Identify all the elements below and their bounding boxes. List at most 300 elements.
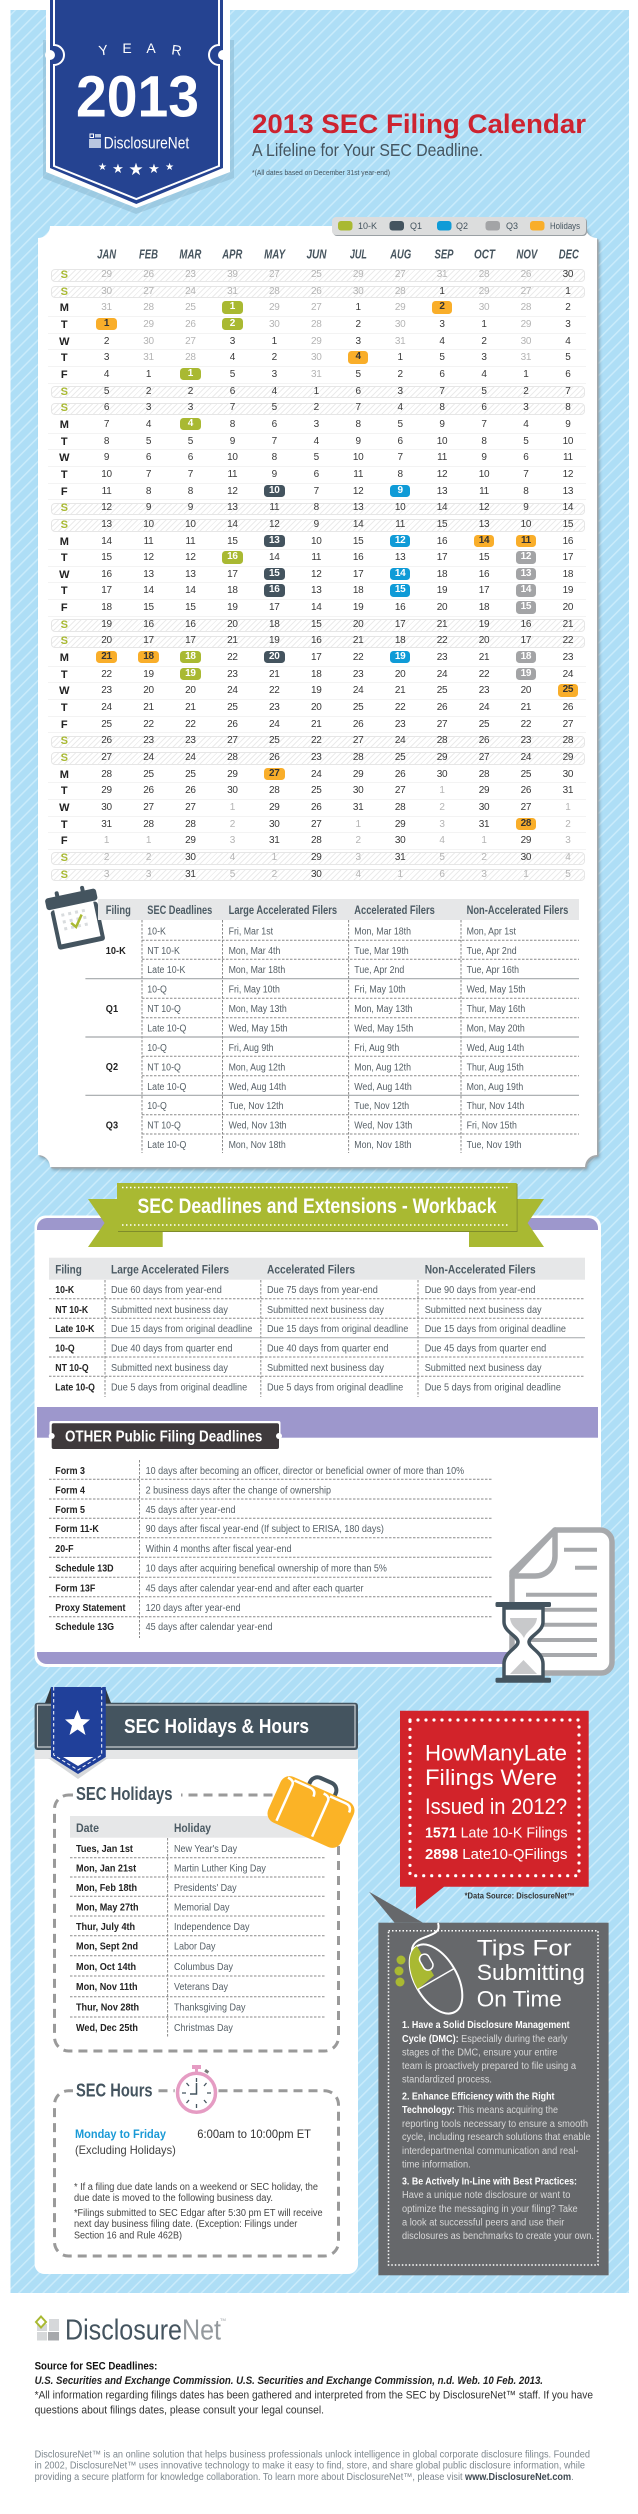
calendar grid: 2	[104, 852, 109, 863]
calendar grid: 28	[479, 269, 489, 280]
calendar grid: 17	[479, 585, 489, 596]
table column: accelerated filers: Mon, May 13th	[354, 1003, 412, 1014]
calendar grid: 26	[395, 769, 405, 780]
calendar grid: 4	[188, 418, 193, 429]
calendar grid: 28	[185, 352, 196, 363]
calendar grid: 29	[395, 302, 405, 313]
calendar grid: 14	[437, 502, 447, 513]
calendar grid: 7	[104, 419, 109, 430]
calendar grid: 25	[311, 269, 322, 280]
calendar grid: 11	[353, 469, 363, 480]
table column: SEC deadlines: Late 10-K	[147, 964, 186, 975]
calendar grid: 10	[437, 436, 447, 447]
panel: calendar card	[38, 226, 600, 1170]
table column: large accelerated filers: Mon, Nov 18th	[229, 1139, 286, 1150]
calendar grid: 30	[521, 336, 531, 347]
calendar grid: 11	[563, 452, 573, 463]
calendar grid: 16	[395, 602, 405, 613]
calendar grid: 1	[272, 336, 277, 347]
calendar grid: W	[59, 569, 69, 581]
legend: Q3	[506, 221, 518, 231]
calendar grid: 8	[481, 436, 487, 447]
calendar grid: 27	[227, 735, 238, 746]
calendar grid: 13	[479, 519, 489, 530]
calendar grid: 19	[185, 668, 196, 679]
calendar grid: 3	[439, 819, 445, 830]
calendar grid: 30	[479, 802, 489, 813]
table column: accelerated filers: Wed, Aug 14th	[354, 1080, 412, 1092]
calendar grid: 27	[269, 269, 280, 280]
calendar grid: 4	[439, 835, 445, 846]
table column: accelerated filers: Mon, Nov 18th	[354, 1139, 411, 1150]
calendar grid: 18	[101, 602, 112, 613]
workback column: large accelerated: Submitted next business day	[111, 1362, 228, 1374]
calendar grid: 29	[479, 286, 489, 297]
calendar grid: 29	[395, 819, 405, 830]
table column: large accelerated filers: Fri, Mar 1st	[229, 925, 273, 937]
calendar grid: 11	[521, 534, 531, 546]
calendar grid: 7	[523, 469, 529, 480]
calendar grid: 3	[272, 369, 277, 380]
calendar grid: 18	[227, 585, 238, 596]
calendar grid: 25	[227, 702, 238, 713]
calendar grid: 3	[146, 869, 151, 880]
calendar grid: 1	[188, 368, 193, 379]
calendar grid: 31	[101, 819, 112, 830]
calendar grid: 26	[521, 269, 531, 280]
banner label: YEAR: Y	[98, 41, 110, 59]
calendar grid: 14	[353, 519, 363, 530]
calendar grid: 10	[479, 469, 489, 480]
calendar grid: 25	[185, 302, 196, 313]
calendar grid: 18	[185, 651, 196, 662]
tip 1: standardized process.	[402, 2074, 492, 2086]
table column: large accelerated filers: Mon, Mar 4th	[229, 944, 280, 956]
tip 1: stages of the DMC, ensure your entire	[402, 2048, 558, 2058]
calendar grid: 26	[311, 286, 322, 297]
calendar grid: M	[60, 302, 69, 314]
calendar grid: 14	[143, 585, 154, 596]
calendar grid: 14	[395, 568, 405, 579]
calendar grid: 16	[185, 619, 196, 630]
calendar grid: 9	[188, 502, 193, 513]
table column: large accelerated filers: Mon, May 13th	[229, 1003, 287, 1014]
calendar grid: 13	[563, 486, 573, 497]
calendar grid: 27	[269, 768, 280, 779]
other column: form: 20-F	[55, 1543, 74, 1555]
calendar grid: 4	[397, 402, 403, 413]
calendar grid: 6	[481, 402, 487, 413]
source text: Source for SEC Deadlines:	[35, 2360, 157, 2372]
calendar grid: 28	[521, 818, 531, 829]
calendar grid: 9	[104, 452, 109, 463]
calendar grid: 15	[269, 568, 280, 579]
calendar grid: 24	[563, 669, 573, 680]
calendar grid: 9	[523, 502, 529, 513]
tip 3	[402, 2176, 594, 2242]
workback column: large accelerated: Due 40 days from quarter end	[111, 1343, 232, 1355]
calendar grid: 20	[353, 619, 363, 630]
banner: year 2013	[43, 0, 234, 214]
calendar grid: 2	[356, 319, 361, 330]
calendar grid: 28	[311, 835, 322, 846]
calendar grid: M	[60, 419, 69, 431]
calendar grid: 21	[563, 619, 573, 630]
workback column: accelerated: Due 15 days from original deadline	[267, 1324, 408, 1335]
calendar grid: 1	[272, 852, 277, 863]
calendar grid: 18	[269, 619, 280, 630]
calendar grid: 25	[353, 702, 363, 713]
table column: filing: Q3	[106, 1120, 118, 1132]
calendar grid: 5	[188, 436, 193, 447]
calendar month headers: FEB	[139, 248, 158, 262]
table header band	[98, 899, 579, 920]
calendar grid: 12	[521, 551, 531, 562]
calendar grid: 30	[521, 852, 531, 863]
calendar month headers: APR	[222, 248, 242, 262]
workback column: filing: Late 10-K	[55, 1324, 95, 1334]
table column: SEC deadlines: Late 10-Q	[147, 1139, 186, 1150]
other column: deadline: 45 days after year-end	[146, 1504, 236, 1516]
calendar grid: 2	[104, 336, 109, 347]
table header band: Non-Accelerated Filers	[467, 903, 569, 917]
calendar grid: 23	[143, 735, 154, 746]
calendar grid: 18	[437, 569, 447, 580]
other column: form: Schedule 13G	[55, 1622, 114, 1633]
workback column: accelerated: Submitted next business day	[267, 1304, 384, 1316]
calendar grid: S	[61, 635, 68, 647]
table column: SEC deadlines: 10-Q	[147, 1041, 167, 1053]
calendar grid: 22	[437, 635, 447, 646]
calendar grid: S	[61, 619, 68, 631]
workback column: accelerated: Due 40 days from quarter end	[267, 1343, 388, 1355]
calendar grid: 24	[185, 286, 196, 297]
calendar grid: 1	[230, 802, 235, 813]
calendar grid: 10	[185, 519, 196, 530]
calendar grid: 9	[314, 519, 319, 530]
calendar grid: 13	[395, 552, 405, 563]
calendar grid: 13	[101, 519, 112, 530]
workback column: filing	[55, 1285, 95, 1393]
heading tag: other public filing deadlines	[49, 1421, 282, 1451]
holiday column: date: Mon, May 27th	[76, 1902, 139, 1914]
calendar grid: 15	[143, 602, 154, 613]
calendar grid: 25	[563, 684, 573, 695]
calendar grid: 3	[481, 352, 487, 363]
holiday column: date: Thur, Nov 28th	[76, 2002, 139, 2014]
table column: non-accelerated filers: Mon, Apr 1st	[467, 925, 516, 937]
calendar grid: 1	[104, 318, 109, 329]
calendar grid: 30	[143, 336, 154, 347]
calendar grid: 30	[101, 286, 112, 297]
calendar grid: 3	[230, 835, 235, 846]
workback header band	[49, 1258, 585, 1280]
workback column: non-accelerated: Due 90 days from year-end	[425, 1285, 536, 1296]
calendar grid: 4	[230, 852, 235, 863]
holiday column: name: Columbus Day	[174, 1961, 233, 1973]
calendar month headers: OCT	[474, 248, 496, 262]
calendar grid: 15	[437, 519, 447, 530]
banner label: YEAR	[98, 40, 183, 59]
calendar grid: 15	[227, 536, 238, 546]
workback column: filing: NT 10-K	[55, 1304, 88, 1315]
table column: accelerated filers: Fri, May 10th	[354, 983, 406, 995]
holiday column: name: New Year's Day	[174, 1844, 237, 1855]
calendar grid: 21	[353, 635, 363, 646]
calendar grid: 17	[521, 635, 531, 646]
calendar grid: 2	[356, 835, 361, 846]
calendar grid: 26	[563, 702, 573, 713]
calendar grid: 6	[565, 369, 570, 380]
holiday column: date: Mon, Feb 18th	[76, 1882, 137, 1894]
calendar grid: 18	[143, 651, 154, 662]
calendar grid: 23	[521, 735, 531, 746]
workback column: non-accelerated: Due 45 days from quarter end	[425, 1343, 546, 1355]
calendar grid: 26	[227, 719, 238, 730]
calendar grid: T	[61, 702, 68, 714]
calendar grid: 2	[565, 819, 570, 830]
tips heading	[477, 1936, 585, 2012]
table column: filing: Q2	[106, 1062, 118, 1073]
calendar grid: 1	[314, 386, 319, 397]
calendar grid: 29	[563, 752, 573, 763]
calendar grid: 12	[437, 469, 447, 480]
calendar grid: 22	[311, 735, 322, 746]
holiday column: date: Wed, Dec 25th	[76, 2022, 138, 2034]
calendar grid: 16	[227, 551, 238, 562]
calendar grid: S	[61, 402, 68, 414]
calendar grid: 1	[565, 802, 570, 813]
calendar grid: T	[61, 785, 68, 797]
banner stars: ★	[112, 161, 124, 176]
calendar grid: 15	[563, 519, 573, 530]
calendar grid: 13	[143, 569, 154, 580]
heading: SEC holidays and hours: SEC Holidays & Hours	[124, 1716, 309, 1738]
calendar grid: S	[61, 735, 68, 747]
calendar grid: M	[60, 536, 69, 548]
calendar grid: 2	[230, 819, 235, 830]
calendar grid: 28	[395, 802, 405, 813]
calendar grid: 30	[563, 269, 573, 280]
heading: SEC hours: SEC Hours	[76, 2081, 153, 2101]
other column: form	[55, 1465, 126, 1633]
calendar grid: 1	[481, 319, 487, 330]
table column: large accelerated filers: Fri, May 10th	[229, 983, 280, 995]
tip 3: 3. Be Actively In-Line with Best Practices:	[402, 2176, 577, 2188]
calendar grid: 13	[311, 585, 322, 596]
calendar grid: 16	[437, 536, 447, 546]
table column: non-accelerated filers: Wed, May 15th	[467, 983, 526, 995]
workback header band: Large Accelerated Filers	[111, 1262, 229, 1276]
calendar grid: 1	[356, 302, 361, 313]
calendar grid: 18	[353, 585, 363, 596]
table column: large accelerated filers: Fri, Aug 9th	[229, 1041, 274, 1053]
calendar grid: 3	[397, 386, 403, 397]
calendar grid: 22	[185, 719, 196, 730]
tip 3: optimize the messaging in your filing? Take	[402, 2204, 578, 2215]
table column: large accelerated filers: Wed, Nov 13th	[229, 1119, 287, 1131]
calendar grid: 31	[395, 336, 405, 347]
calendar grid: 9	[230, 436, 235, 447]
table: workback	[49, 1258, 585, 1397]
calendar grid: 23	[395, 719, 405, 730]
calendar grid: 20	[143, 685, 154, 696]
holiday column: date: Mon, Oct 14th	[76, 1961, 136, 1973]
workback column: large accelerated	[111, 1285, 252, 1394]
holiday table header	[70, 1816, 326, 1838]
calendar grid: 2	[481, 336, 487, 347]
calendar grid: 3	[188, 402, 193, 413]
calendar grid: 24	[521, 752, 531, 763]
calendar grid: 3	[356, 852, 361, 863]
calendar grid: 4	[230, 352, 235, 363]
calendar grid: 14	[479, 534, 489, 546]
calendar grid: 1	[523, 869, 529, 880]
calendar grid: 20	[479, 635, 489, 646]
calendar grid: 8	[314, 502, 319, 513]
calendar grid: 22	[101, 669, 112, 680]
calendar grid: 26	[185, 319, 196, 330]
calendar grid: 30	[227, 785, 238, 796]
calendar grid: 21	[227, 635, 238, 646]
calendar grid: 6	[523, 452, 529, 463]
calendar grid: 27	[395, 785, 405, 796]
calendar grid: 31	[311, 369, 322, 380]
other column: deadline: 120 days after year-end	[146, 1602, 241, 1614]
calendar grid: 10	[353, 452, 363, 463]
holiday column: name: Labor Day	[174, 1941, 216, 1953]
calendar grid: 26	[185, 785, 196, 796]
workback column: accelerated	[267, 1285, 408, 1394]
table column: accelerated filers: Tue, Nov 12th	[354, 1100, 409, 1111]
holiday column: date: Mon, Nov 11th	[76, 1982, 138, 1993]
banner number: 2013: 2013	[76, 65, 199, 130]
holiday column: name: Martin Luther King Day	[174, 1863, 266, 1875]
calendar grid: 26	[521, 785, 531, 796]
calendar grid: T	[61, 552, 68, 564]
calendar grid: 19	[353, 602, 363, 613]
other column: deadline: 45 days after calendar year-end	[146, 1622, 273, 1633]
calendar grid: 12	[143, 552, 154, 563]
calendar grid: 12	[479, 502, 489, 513]
calendar grid: 25	[101, 719, 112, 730]
calendar grid: 13	[437, 486, 447, 497]
calendar grid: 17	[269, 602, 280, 613]
other column: form: Form 4	[55, 1485, 86, 1497]
calendar grid: 6	[104, 402, 109, 413]
calendar grid: S	[61, 502, 68, 514]
table column: accelerated filers: Tue, Mar 19th	[354, 944, 409, 956]
table column: non-accelerated filers: Thur, Aug 15th	[467, 1061, 524, 1073]
calendar grid: 11	[269, 502, 279, 513]
hours: footnotes	[74, 2182, 323, 2242]
calendar grid: 3	[356, 336, 361, 347]
calendar grid: 16	[269, 584, 280, 595]
calendar grid: 13	[185, 569, 196, 580]
legend: Holidays	[550, 221, 580, 231]
note: year-end basis: *(All dates based on December 31st year-end)	[252, 168, 390, 177]
calendar grid: 27	[563, 719, 573, 730]
table column: SEC deadlines: 10-Q	[147, 983, 167, 995]
calendar grid: 26	[437, 702, 447, 713]
calendar grid: 30	[311, 869, 322, 880]
calendar grid: 15	[311, 619, 322, 630]
calendar grid: 3	[230, 336, 235, 347]
calendar grid: 29	[311, 852, 322, 863]
calendar grid: 29	[227, 769, 238, 780]
calendar grid: 22	[479, 669, 489, 680]
calendar grid: 28	[311, 319, 322, 330]
calendar grid: 16	[521, 619, 531, 630]
calendar grid: 23	[437, 652, 447, 663]
calendar grid: 4	[439, 336, 445, 347]
hours: footnotes: Section 16 and Rule 462B)	[74, 2231, 182, 2242]
calendar grid: F	[61, 369, 68, 381]
tip 2: Technology: This means acquiring the	[402, 2105, 558, 2116]
calendar grid: 23	[479, 685, 489, 696]
workback column: non-accelerated: Due 15 days from original deadline	[425, 1324, 566, 1335]
table header band: Accelerated Filers	[354, 903, 435, 917]
calendar grid: 6	[397, 436, 403, 447]
calendar grid: 30	[353, 286, 363, 297]
workback column: accelerated: Due 75 days from year-end	[267, 1285, 378, 1296]
calendar grid: 26	[269, 752, 280, 763]
calendar grid: 24	[185, 752, 196, 763]
table column: SEC deadlines: 10-K	[147, 925, 167, 937]
other column: deadline: 45 days after calendar year-end and after each quarter	[146, 1583, 363, 1595]
calendar grid: 27	[353, 735, 363, 746]
calendar grid: 22	[395, 702, 405, 713]
tip 3: a look at successful peers and use their	[402, 2218, 565, 2228]
calendar grid: 4	[356, 351, 361, 362]
calendar grid: 15	[353, 536, 363, 546]
calendar grid: 16	[353, 552, 363, 563]
calendar grid: 30	[269, 819, 280, 830]
calendar grid: 31	[185, 869, 196, 880]
table column: SEC deadlines: NT 10-Q	[147, 1061, 181, 1073]
calendar month headers: SEP	[434, 248, 454, 262]
legend: Q2	[456, 221, 468, 231]
calendar grid: 8	[146, 486, 151, 497]
calendar grid: 2	[565, 302, 570, 313]
calendar grid: 11	[311, 552, 321, 563]
other column: deadline: 2 business days after the change of ownership	[146, 1485, 331, 1497]
calendar grid: 1	[439, 286, 445, 297]
calendar grid: 29	[269, 802, 280, 813]
hours: footnotes: due date is moved to the following business day.	[74, 2193, 273, 2204]
calendar grid: 28	[521, 302, 531, 313]
calendar grid: T	[61, 352, 68, 364]
calendar grid: 4	[314, 436, 319, 447]
calendar grid: 28	[101, 769, 112, 780]
calendar grid: 4	[523, 419, 529, 430]
holiday column: name: Independence Day	[174, 1921, 250, 1933]
calendar grid: 6	[439, 869, 445, 880]
calendar grid: 3	[439, 319, 445, 330]
calendar grid: 9	[481, 452, 487, 463]
calendar grid: 4	[272, 386, 277, 397]
source text: questions about filings dates, please consult your legal counsel.	[35, 2404, 324, 2416]
workback column: filing: NT 10-Q	[55, 1362, 89, 1373]
workback column: large accelerated: Submitted next business day	[111, 1304, 228, 1316]
calendar grid: 26	[101, 735, 112, 746]
calendar grid: 30	[479, 302, 489, 313]
calendar grid: 1	[565, 286, 570, 297]
workback column: large accelerated: Due 5 days from original deadline	[111, 1382, 247, 1394]
table column: filing	[106, 946, 126, 1132]
table column: non-accelerated filers: Thur, May 16th	[467, 1003, 525, 1014]
other column: deadline	[146, 1465, 465, 1633]
